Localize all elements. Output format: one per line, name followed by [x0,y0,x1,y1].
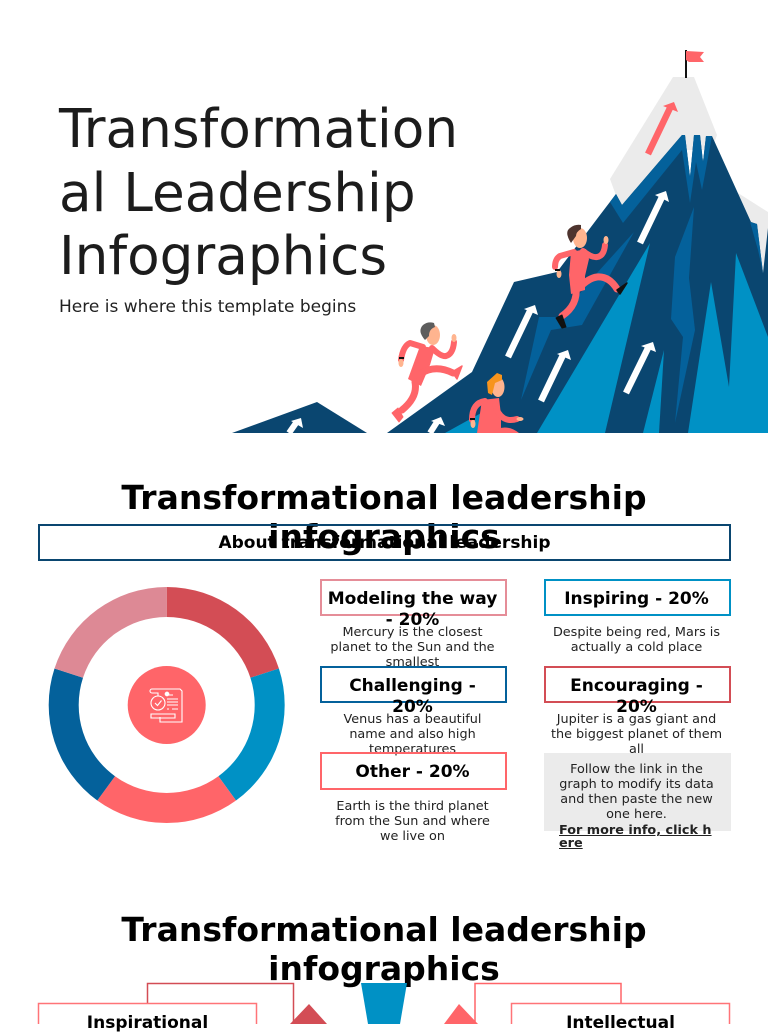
note text: Follow the link in the [570,762,703,777]
note text: graph to modify its data [559,777,714,792]
note link: For more info, click h [559,823,712,838]
card text [551,712,722,757]
climber: middle [392,322,462,422]
card text: smallest [386,655,439,670]
segment: inspiring [218,668,285,800]
card text: Earth is the third planet [336,799,489,814]
card heading [328,589,497,630]
small peak [232,402,367,433]
section heading: bottom [121,910,647,988]
segment: encouraging [54,587,167,678]
card text [553,625,720,655]
section heading: about [121,478,647,556]
segment: other [97,776,236,823]
main mountain [387,135,768,433]
card heading [349,676,476,716]
card: challenging [320,666,507,757]
banner box: About transformational leadership [218,533,551,553]
white arrows [430,191,669,433]
section heading: about: infographics [268,517,500,556]
climber: bottom [470,373,524,433]
light-blue faces [445,243,768,433]
card: encouraging [544,666,731,757]
segment: modeling [167,587,279,678]
banner box [38,524,731,561]
note text: one here. [606,807,667,822]
title: al Leadership [59,162,416,224]
donut chart [48,587,285,823]
note box [544,753,731,831]
label: intellectual: Intellectual [566,1013,675,1033]
note text: and then paste the new [560,792,713,807]
lower left box [38,1004,256,1033]
card heading: - 20% [386,610,439,630]
card text [335,799,490,844]
section heading: bottom: Transformational leadership [121,910,647,949]
note text [559,762,714,822]
card: inspiring [544,579,731,655]
note link [559,823,712,851]
mid-blue shading [521,135,763,423]
section heading: about: Transformational leadership [121,478,647,517]
card heading: 20% [392,696,433,716]
card text: from the Sun and where [335,814,490,829]
card text: temperatures [369,742,456,757]
card border [544,666,731,703]
card text: all [629,742,644,757]
icon: document with check [150,689,182,722]
upper left box [148,984,294,1033]
card heading: Modeling the way [328,589,497,609]
snow caps [610,77,768,273]
card text: name and also high [349,727,476,742]
title [58,98,458,287]
card border [320,666,507,703]
illustration: mountain with climbers [232,50,768,433]
card heading: 20% [616,696,657,716]
left triangle [290,1004,327,1024]
diagram: bottom shapes [38,982,730,1024]
card text: the biggest planet of them [551,727,722,742]
segment: challenging [49,668,115,800]
card border [544,579,731,616]
lower right box [512,1004,730,1033]
note link: ere [559,836,583,851]
center circle [128,666,206,744]
title: Transformation [59,98,458,160]
card text: Venus has a beautiful [344,712,481,727]
card: other [320,752,507,844]
card text [330,625,495,670]
title: Infographics [59,225,387,287]
subtitle: Here is where this template begins [59,297,356,317]
card text [344,712,481,757]
card heading: Other - 20% [355,762,470,782]
card heading: Inspiring - 20% [564,589,709,609]
card border [320,579,507,616]
card border [320,752,507,790]
card heading: Encouraging - [570,676,703,696]
card heading: Challenging - [349,676,476,696]
center trapezoid [361,983,407,1024]
card heading [570,676,703,716]
section heading: bottom: infographics [268,949,500,988]
climber: top [555,225,627,328]
card text: Jupiter is a gas giant and [557,712,716,727]
red arrow [648,102,678,154]
card: modeling the way [320,579,507,670]
card text: Mercury is the closest [343,625,482,640]
label: inspirational: Inspirational [87,1013,208,1033]
card text: we live on [380,829,445,844]
card text: planet to the Sun and the [330,640,495,655]
card text: Despite being red, Mars is [553,625,720,640]
upper right box [475,984,621,1033]
right triangle [444,1004,478,1024]
flag [686,50,704,78]
card text: actually a cold place [571,640,702,655]
